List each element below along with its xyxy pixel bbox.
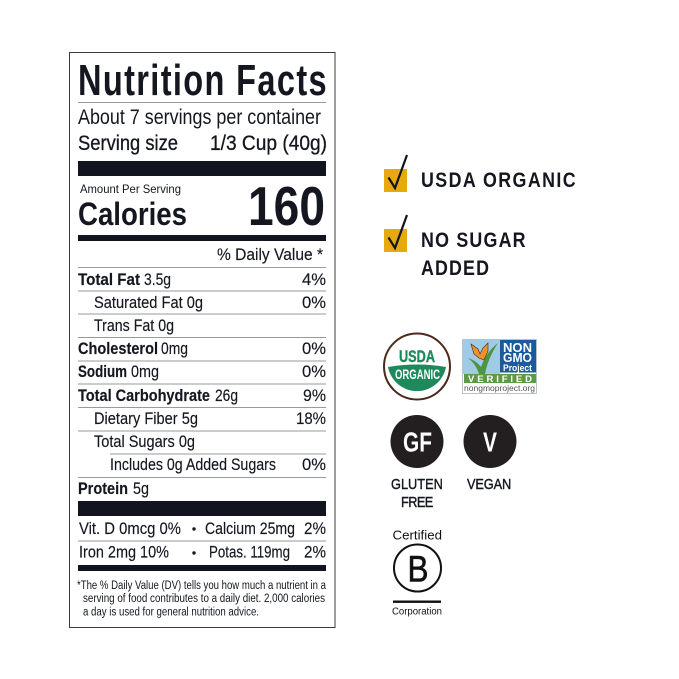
row: iron and potassium: Iron 2mg 10% bbox=[79, 544, 169, 562]
row: saturated fat: Saturated Fat 0g bbox=[94, 294, 203, 312]
callout: USDA organic bbox=[384, 155, 576, 192]
text: footnote: serving of food contributes to a daily diet. 2,000 calories bbox=[83, 593, 325, 605]
icon: gluten free badge bbox=[390, 415, 444, 468]
row: protein: 5g bbox=[133, 480, 149, 498]
row: added sugars: Includes 0g Added Sugars bbox=[110, 456, 276, 474]
row: cholesterol: 0mg bbox=[161, 340, 188, 358]
icon: Non-GMO Project verified seal: VERIFIED bbox=[468, 374, 532, 385]
text: calories label: Calories bbox=[78, 196, 187, 232]
icon: Non-GMO Project verified seal bbox=[462, 340, 536, 394]
icon: Non-GMO Project verified seal: Project bbox=[503, 363, 532, 373]
text: servings per container: About 7 servings per container bbox=[78, 106, 321, 129]
row: vitamin d and calcium: 2% bbox=[304, 520, 326, 538]
row: iron and potassium: 2% bbox=[304, 544, 326, 562]
row: added sugars: 0% bbox=[302, 456, 326, 474]
row: vitamin d and calcium: Calcium 25mg bbox=[205, 520, 295, 538]
panel: nutrition facts label bbox=[70, 52, 335, 628]
row: protein: Protein bbox=[78, 480, 128, 498]
row: sodium: Sodium bbox=[78, 363, 127, 381]
thick bar bbox=[78, 501, 326, 516]
thick bar bbox=[78, 161, 326, 176]
callout: no sugar added: ADDED bbox=[421, 257, 489, 280]
text: serving size bbox=[78, 132, 327, 155]
row: total fat: 3.5g bbox=[144, 271, 171, 289]
row: dietary fiber: 18% bbox=[296, 410, 326, 428]
text: gluten free label: GLUTEN bbox=[391, 475, 443, 492]
text: serving size: 1/3 Cup (40g) bbox=[210, 132, 327, 155]
row: vitamin d and calcium bbox=[79, 520, 326, 538]
row: total carbohydrate: Total Carbohydrate bbox=[78, 387, 210, 405]
icon: Non-GMO Project verified seal: NON bbox=[503, 341, 532, 355]
text: percent daily value header: % Daily Value * bbox=[217, 246, 324, 264]
row: total carbohydrate: 9% bbox=[303, 387, 326, 405]
text: footnote bbox=[77, 580, 327, 618]
row: total fat: 4% bbox=[302, 271, 326, 289]
row: iron and potassium: Potas. 119mg bbox=[209, 544, 290, 562]
icon: USDA organic seal: ORGANIC bbox=[395, 367, 440, 382]
icon: vegan badge: V bbox=[483, 426, 497, 458]
icon: USDA organic seal: USDA bbox=[399, 347, 435, 366]
row: total sugars: Total Sugars 0g bbox=[94, 433, 195, 451]
icon: USDA organic seal bbox=[384, 334, 450, 400]
row: cholesterol: Cholesterol bbox=[78, 340, 158, 358]
row: total carbohydrate bbox=[78, 387, 326, 405]
medium bar bbox=[78, 565, 326, 571]
row: dietary fiber: Dietary Fiber 5g bbox=[94, 410, 198, 428]
row: saturated fat bbox=[94, 294, 326, 312]
icon: certified B corporation logo bbox=[392, 528, 442, 618]
medium bar bbox=[78, 235, 326, 241]
text: amount per serving: Amount Per Serving bbox=[80, 184, 181, 196]
row: total fat: Total Fat bbox=[78, 271, 140, 289]
row: total fat bbox=[78, 271, 326, 289]
icon: Non-GMO Project verified seal: nongmoproject.org bbox=[464, 384, 535, 393]
text: gluten free label: FREE bbox=[401, 493, 433, 510]
text: serving size: Serving size bbox=[78, 132, 178, 155]
row: trans fat: Trans Fat 0g bbox=[94, 317, 174, 335]
icon: Non-GMO Project verified seal: GMO bbox=[503, 351, 532, 365]
text: footnote: a day is used for general nutrition advice. bbox=[83, 606, 259, 618]
row: sodium: 0% bbox=[302, 363, 326, 381]
row: vitamin d and calcium: Vit. D 0mcg 0% bbox=[79, 520, 181, 538]
icon: vegan badge bbox=[464, 415, 516, 468]
icon: certified B corporation logo: B bbox=[408, 548, 428, 590]
row: sodium bbox=[78, 363, 326, 381]
row: iron and potassium bbox=[79, 544, 326, 562]
text: vegan label: VEGAN bbox=[467, 475, 511, 492]
icon: gluten free badge: GF bbox=[403, 426, 432, 458]
row: total carbohydrate: 26g bbox=[215, 387, 238, 405]
text: gluten free label bbox=[391, 475, 443, 510]
text: calories value: 160 bbox=[248, 175, 325, 237]
icon: certified B corporation logo: Corporation bbox=[392, 606, 442, 618]
callout: no sugar added: NO SUGAR bbox=[421, 229, 526, 252]
row: sodium: 0mg bbox=[131, 363, 159, 381]
callout: USDA organic: USDA ORGANIC bbox=[421, 169, 576, 192]
callout: no sugar added bbox=[384, 215, 526, 280]
heading: Nutrition Facts: Nutrition Facts bbox=[78, 56, 327, 105]
row: saturated fat: 0% bbox=[302, 294, 326, 312]
row: cholesterol bbox=[78, 340, 326, 358]
icon: certified B corporation logo: Certified bbox=[392, 528, 442, 542]
row: cholesterol: 0% bbox=[302, 340, 326, 358]
row: dietary fiber bbox=[94, 410, 326, 428]
text: footnote: *The % Daily Value (DV) tells you how much a nutrient in a bbox=[77, 580, 327, 592]
